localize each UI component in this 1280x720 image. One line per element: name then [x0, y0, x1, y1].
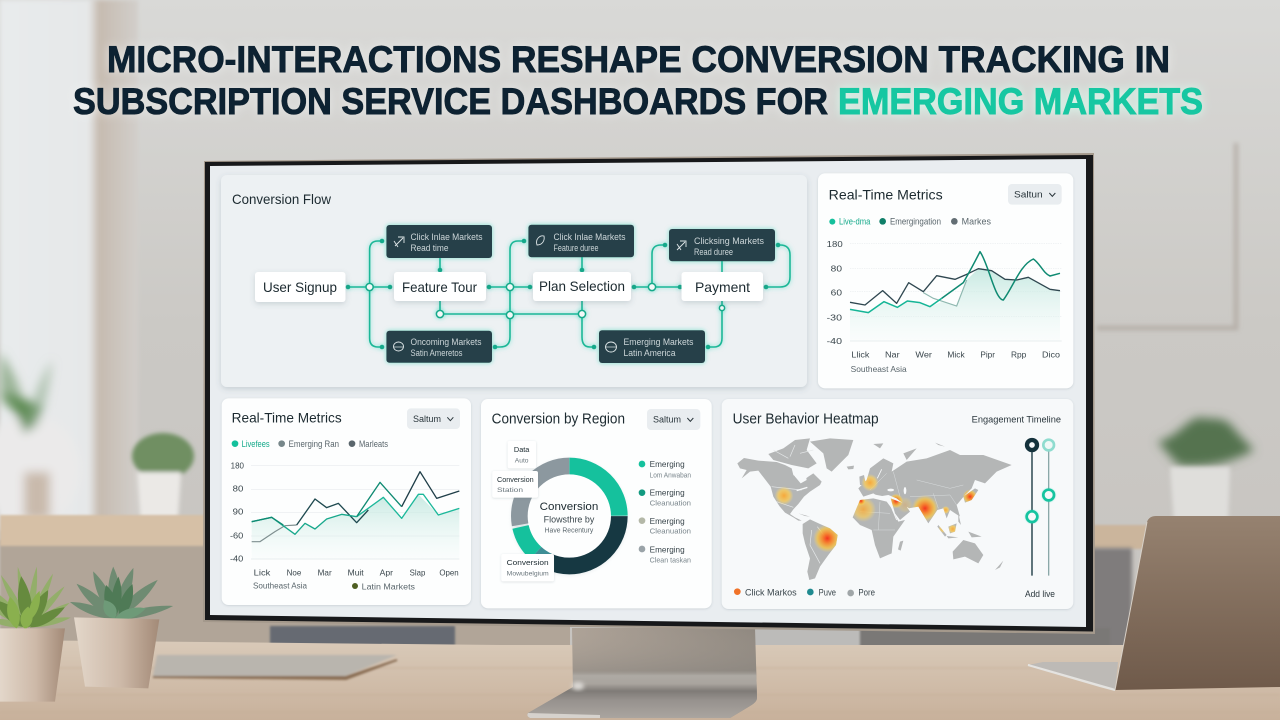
panel: real-time metrics, bottom left: [222, 398, 471, 605]
callout: click markets B: Click Inlae Markets: [554, 232, 626, 242]
line chart: 80: [233, 484, 244, 494]
tablet on desk: [153, 655, 397, 679]
heading: real-time metrics: Real-Time Metrics: [232, 409, 342, 425]
legend: [232, 439, 388, 449]
succulent plant, right: [68, 566, 174, 688]
line chart: Nar: [885, 349, 900, 359]
donut tooltip: conversion station: Conversion: [497, 475, 534, 484]
background plant, right: [1157, 417, 1254, 466]
icon: pill: [394, 342, 404, 351]
line chart: Southeast Asia: [253, 581, 307, 591]
legend: Markes: [962, 216, 991, 226]
line chart: 90: [233, 507, 244, 517]
region legend: Emerging: [650, 546, 685, 555]
donut tooltip: data: Data: [514, 445, 530, 454]
americas: [737, 438, 854, 580]
heading: engagement timeline: Engagement Timeline: [972, 414, 1061, 424]
legend: Marleats: [359, 439, 388, 449]
line chart: [827, 239, 1062, 374]
donut tooltip: data: [508, 441, 536, 468]
region legend: Emerging: [650, 517, 685, 526]
line chart: Mar: [318, 567, 332, 577]
heatmap legend: Pore: [858, 588, 875, 598]
line chart: -60: [230, 530, 244, 540]
donut tooltip: data: Auto: [515, 457, 529, 464]
node: feature tour: Feature Tour: [402, 279, 477, 295]
title: SUBSCRIPTION SERVICE DASHBOARDS FOR: [73, 81, 828, 122]
donut tooltip: conversion marketplace: Conversion: [507, 558, 549, 567]
line chart: [230, 460, 459, 591]
donut tooltip: conversion station: Station: [497, 487, 523, 494]
callout: clicking markets C: [669, 229, 775, 261]
line chart: Llick: [851, 349, 870, 359]
callout: oncoming markets D: Oncoming Markets: [410, 337, 482, 347]
panel: real-time metrics, top right: [818, 173, 1073, 388]
donut tooltip: conversion marketplace: Mowubelgium: [507, 571, 549, 578]
region legend: Clean taskan: [650, 557, 691, 564]
line chart: -40: [827, 336, 842, 346]
region legend: Emerging: [650, 489, 685, 498]
legend: Livefees: [242, 439, 270, 449]
flow dots and junctions: [346, 239, 780, 349]
callout: emerging markets E: Emerging Markets: [624, 337, 694, 347]
line chart: 60: [831, 287, 842, 297]
node: plan selection: Plan Selection: [539, 278, 625, 294]
succulent plant, left: [0, 566, 71, 702]
dropdown: Saltun: [1014, 190, 1043, 200]
node: payment: Payment: [695, 279, 750, 295]
line chart: Open: [439, 567, 459, 577]
flow connectors: [348, 241, 790, 347]
icon: cursor arrow: [394, 237, 404, 247]
callout: oncoming markets D: [386, 331, 492, 363]
callout: emerging markets E: Latin America: [624, 348, 676, 358]
line chart: 180: [231, 460, 244, 470]
title: MICRO-INTERACTIONS RESHAPE CONVERSION TRACKING IN: [107, 39, 1170, 80]
heatmap legend: [734, 587, 875, 598]
heading: conversion flow: Conversion Flow: [232, 191, 332, 207]
donut centre label: Conversion: [540, 501, 598, 513]
donut chart: [512, 460, 627, 574]
region legend: [639, 460, 691, 564]
heading: conversion by region: Conversion by Region: [492, 411, 625, 427]
region legend: Cleanuation: [650, 529, 691, 536]
callout: emerging markets E: [599, 330, 705, 363]
panel: conversion by region: [481, 399, 712, 608]
monitor stand: [527, 628, 757, 718]
node: user signup: [255, 272, 346, 302]
callout: clicking markets C: Read duree: [694, 247, 733, 257]
line chart: Pipr: [980, 349, 995, 359]
label: add live: Add live: [1025, 589, 1055, 599]
world map: [737, 438, 1012, 580]
line chart: Slap: [410, 567, 425, 577]
dropdown: [407, 408, 460, 429]
icon: cursor arrow: [677, 241, 686, 250]
monitor frame: [203, 153, 1095, 634]
region legend: Emerging: [650, 460, 685, 469]
dropdown: Saltum: [413, 414, 441, 424]
callout: click markets A: Click Inlae Markets: [410, 232, 483, 242]
line chart: Apr: [380, 567, 393, 577]
donut tooltip: conversion station: [492, 471, 538, 498]
heading: user behavior heatmap: User Behavior Heatmap: [733, 412, 879, 428]
region legend: Lom Anwaban: [650, 472, 691, 479]
dropdown: [647, 409, 700, 430]
heatmap legend: Click Markos: [745, 587, 797, 597]
timeline tracks: [1027, 440, 1054, 576]
line chart: Wer: [915, 349, 932, 359]
panel: user behavior heatmap: [722, 399, 1073, 609]
line chart: 80: [831, 264, 842, 274]
node: payment: [682, 272, 763, 301]
background plant and vase, far left: [0, 352, 80, 525]
donut centre label: Have Recentury: [545, 527, 594, 534]
icon: pill: [606, 342, 616, 352]
callout: click markets A: [386, 225, 492, 258]
heatmap legend: Puve: [819, 588, 836, 598]
desk: [0, 640, 1280, 720]
legend: Live-dma: [839, 216, 870, 226]
line chart: Dico: [1042, 349, 1060, 359]
background shelf and dark area: [0, 515, 1150, 653]
panel: conversion flow: [221, 175, 807, 387]
callout: oncoming markets D: Satin Ameretos: [410, 348, 463, 358]
legend: Emerging Ran: [289, 439, 339, 449]
legend: Emergingation: [890, 216, 941, 226]
line chart: Mick: [947, 349, 965, 359]
line chart: Latin Markets: [362, 581, 416, 591]
callout: click markets B: [528, 225, 634, 257]
laptop: [1028, 516, 1280, 690]
line chart: -30: [827, 312, 842, 322]
donut tooltip: conversion marketplace: [501, 554, 554, 581]
heading: real-time metrics: Real-Time Metrics: [829, 186, 943, 202]
line chart: -40: [230, 554, 244, 564]
region legend: Cleanuation: [650, 501, 691, 508]
callout: click markets A: Read time: [410, 243, 448, 253]
node: feature tour: [394, 272, 486, 301]
line chart: Muit: [348, 567, 364, 577]
legend: [829, 216, 991, 226]
line chart: Lick: [254, 567, 271, 577]
dropdown: Saltum: [653, 415, 681, 425]
node: user signup: User Signup: [263, 279, 337, 295]
background pot, right: [1170, 467, 1230, 523]
line chart: Rpp: [1011, 349, 1026, 359]
title: [73, 39, 1203, 122]
callout: click markets B: Feature duree: [554, 243, 598, 253]
background plant on shelf, left: [132, 433, 194, 518]
title: EMERGING MARKETS: [838, 81, 1203, 122]
line chart: Southeast Asia: [851, 364, 907, 374]
dropdown: [1008, 184, 1062, 205]
icon: leaf: [537, 236, 544, 245]
node: plan selection: [533, 272, 631, 301]
europe, asia, africa, oceania: [851, 443, 1012, 570]
callout: clicking markets C: Clicksing Markets: [694, 236, 764, 246]
line chart: Noe: [287, 567, 301, 577]
line chart: 180: [827, 239, 843, 249]
donut centre label: Flowsthre by: [544, 514, 595, 524]
